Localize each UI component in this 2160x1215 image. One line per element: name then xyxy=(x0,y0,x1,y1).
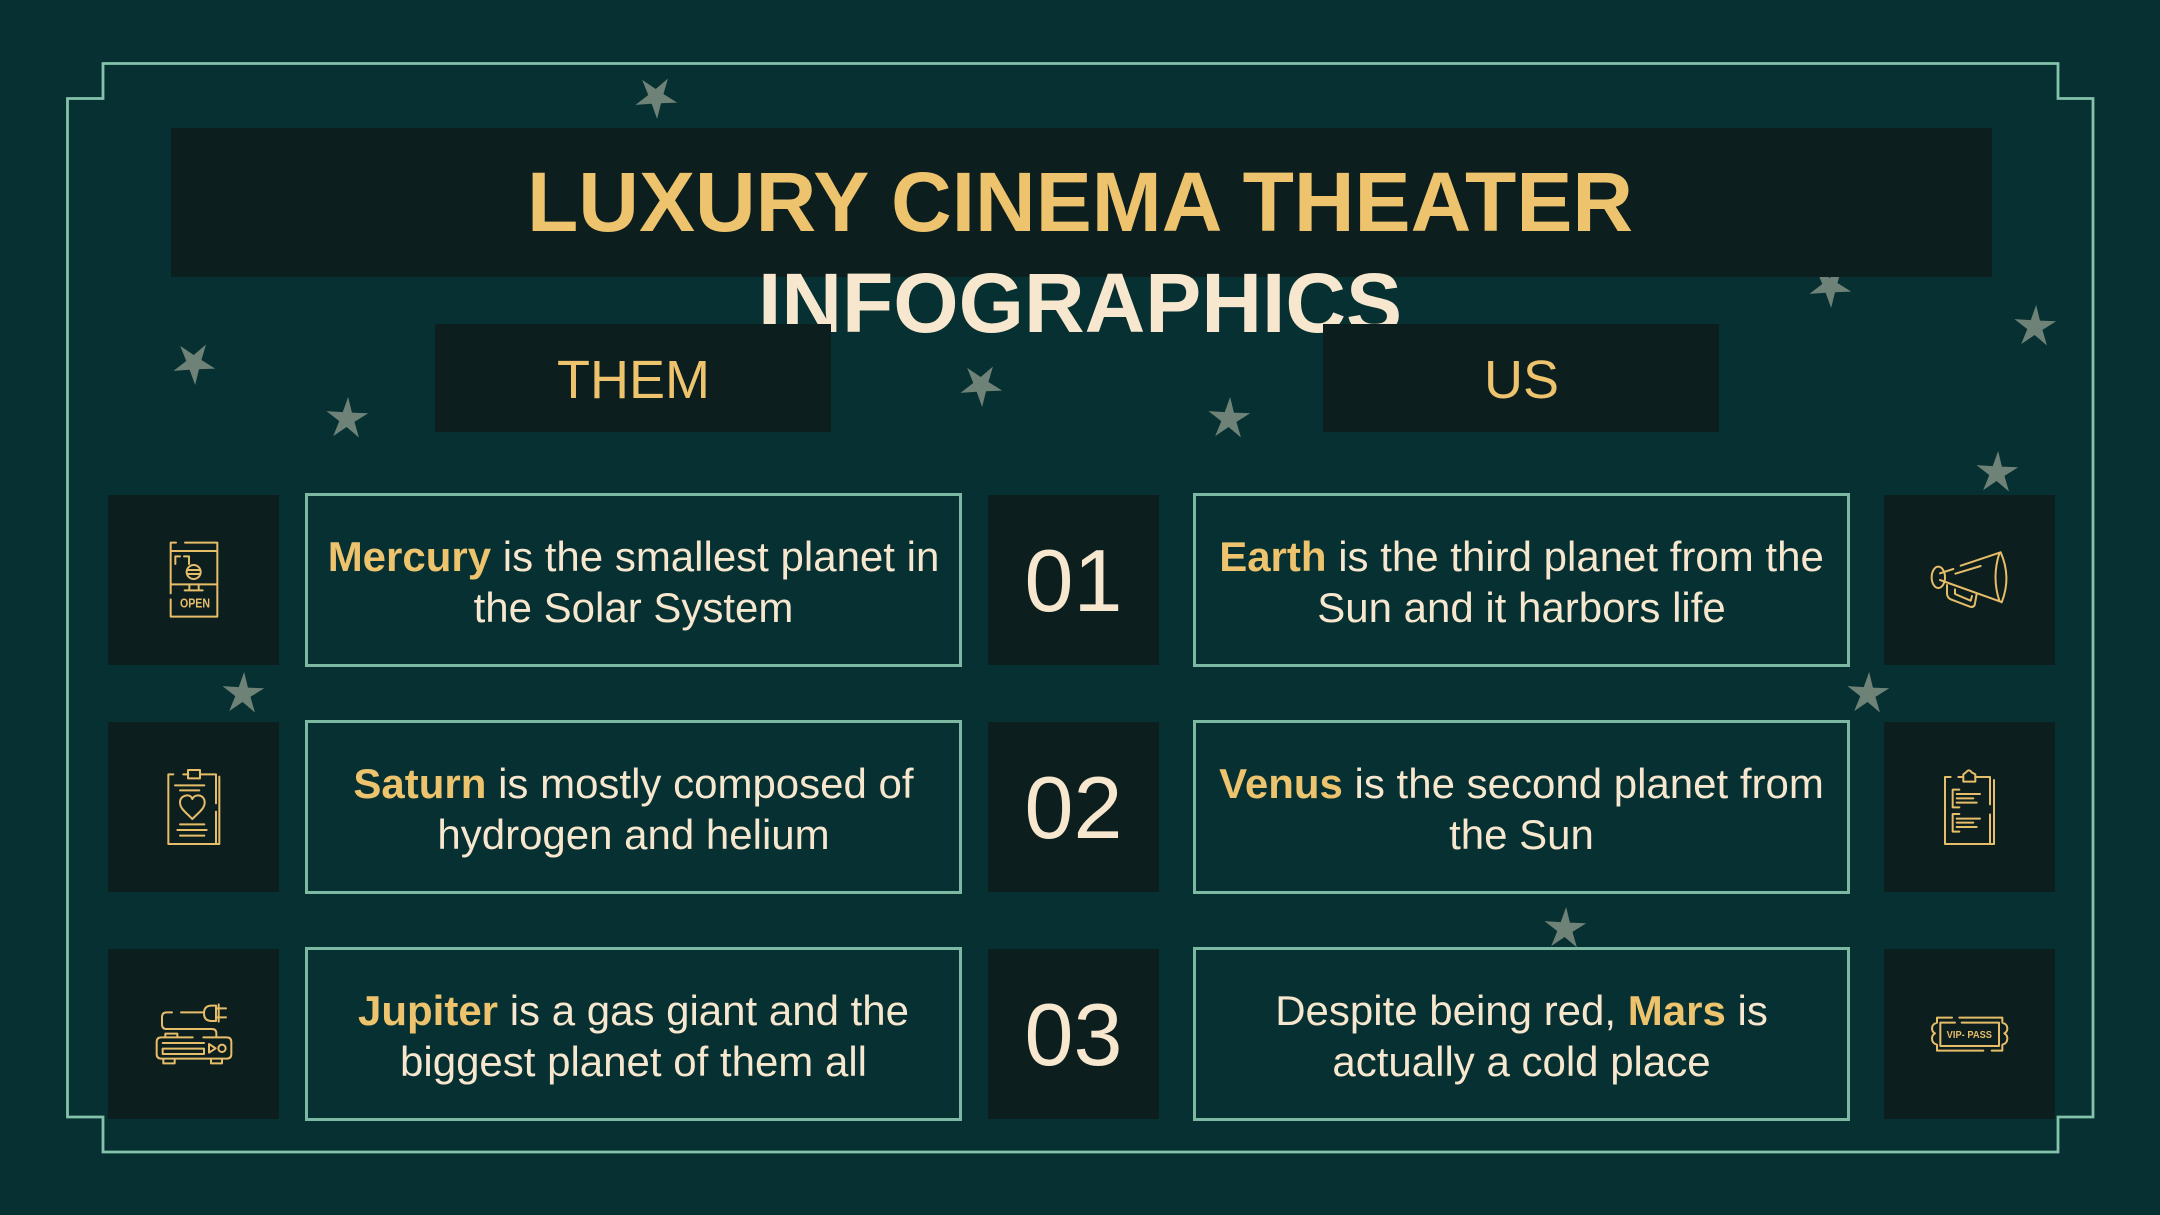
title bar xyxy=(171,128,1992,277)
icon: open sign: OPEN xyxy=(180,596,210,610)
icon: projector xyxy=(108,949,279,1119)
star 10 xyxy=(1846,671,1890,713)
title xyxy=(527,155,1633,350)
icon: clipboard with heart xyxy=(108,722,279,892)
column heading: them xyxy=(435,324,831,432)
text: jupiter: Jupiter is a gas giant and the xyxy=(358,986,909,1034)
text: earth: Earth is the third planet from the xyxy=(1219,532,1824,580)
star 11 xyxy=(1543,906,1587,948)
star 4 xyxy=(954,355,1011,411)
text: mercury: the Solar System xyxy=(474,584,793,630)
icon: open sign xyxy=(108,495,279,665)
star 2 xyxy=(167,333,224,389)
number 02: 02 xyxy=(1025,758,1122,857)
icon: vip pass: VIP- PASS xyxy=(1947,1030,1992,1041)
number 02 xyxy=(988,722,1159,892)
icon: vip pass xyxy=(1884,949,2055,1119)
text: saturn: hydrogen and helium xyxy=(437,810,830,858)
star 7 xyxy=(2013,304,2057,346)
number 01: 01 xyxy=(1025,531,1122,630)
text: venus: the Sun xyxy=(1449,810,1594,858)
star 5 xyxy=(1207,396,1251,438)
text: mars xyxy=(1193,947,1850,1121)
text: venus: Venus is the second planet from xyxy=(1219,760,1824,806)
star 6 xyxy=(1803,256,1860,312)
column heading: us: US xyxy=(1484,350,1559,410)
text: earth xyxy=(1193,493,1850,667)
text: saturn: Saturn is mostly composed of xyxy=(353,760,914,806)
text: mars: actually a cold place xyxy=(1332,1038,1711,1084)
star 8 xyxy=(1975,450,2019,492)
star 9 xyxy=(221,671,265,713)
star 3 xyxy=(325,396,369,438)
text: jupiter xyxy=(305,947,962,1121)
text: jupiter: biggest planet of them all xyxy=(400,1038,867,1084)
icon: megaphone xyxy=(1884,495,2055,665)
number 03 xyxy=(988,949,1159,1119)
column heading: them: THEM xyxy=(557,350,710,410)
icon: clipboard list xyxy=(1884,722,2055,892)
text: mars: Despite being red, Mars is xyxy=(1275,986,1768,1034)
number 03: 03 xyxy=(1025,985,1122,1084)
column heading: us xyxy=(1323,324,1719,432)
star 1 xyxy=(629,67,686,123)
text: saturn xyxy=(305,720,962,894)
text: earth: Sun and it harbors life xyxy=(1317,584,1726,630)
title: INFOGRAPHICS xyxy=(758,256,1402,350)
text: venus xyxy=(1193,720,1850,894)
number 01 xyxy=(988,495,1159,665)
title: LUXURY CINEMA THEATER xyxy=(527,155,1633,249)
text: mercury xyxy=(305,493,962,667)
text: mercury: Mercury is the smallest planet in xyxy=(328,532,939,580)
